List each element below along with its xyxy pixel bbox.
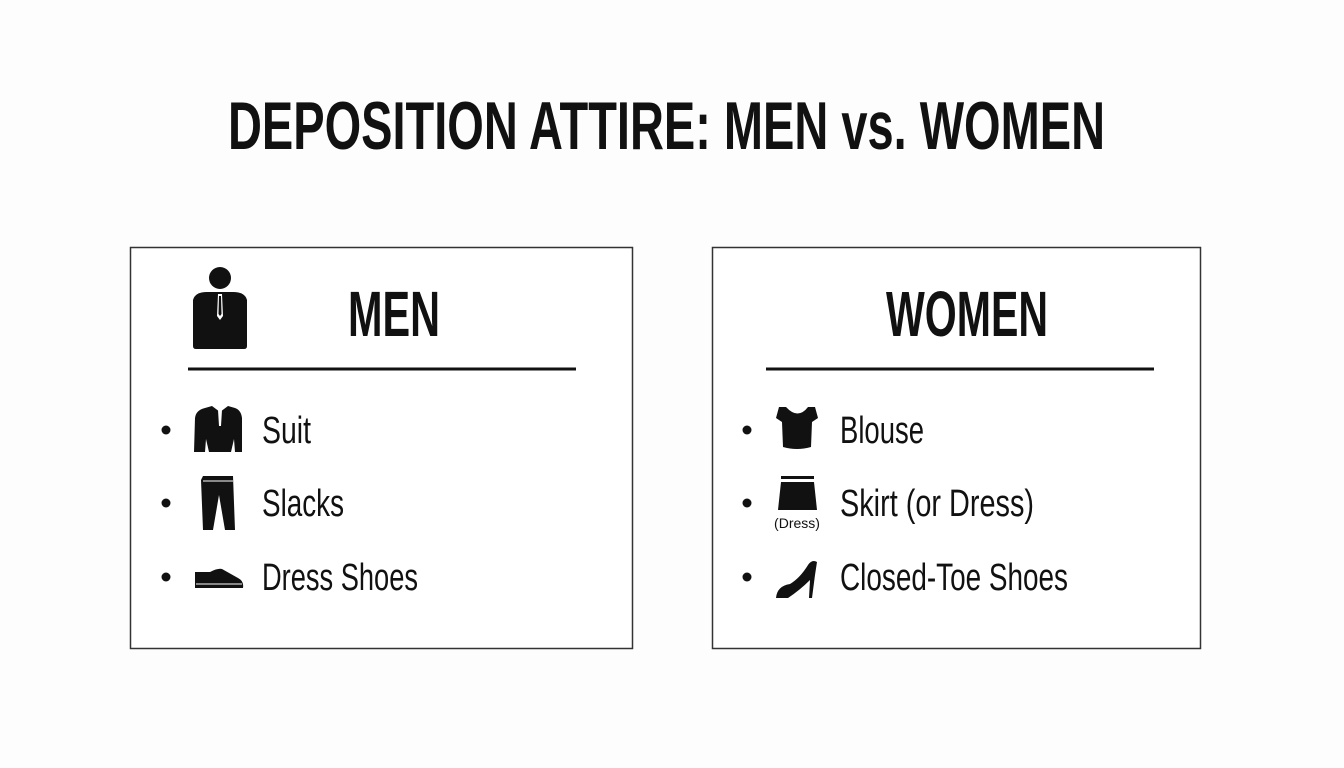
item: closed-toe shoes: Closed-Toe Shoes (840, 557, 1068, 599)
item: dress shoes (162, 557, 418, 599)
panel: men (130, 248, 632, 648)
heading: men: MEN (348, 278, 440, 350)
item: dress shoes: Dress Shoes (262, 557, 418, 599)
icon: man in suit (193, 267, 247, 349)
heading: women: WOMEN (886, 278, 1048, 350)
item: suit: Suit (262, 410, 311, 452)
item: blouse (742, 407, 924, 452)
item: suit (162, 406, 311, 452)
item: skirt: Skirt (or Dress) (840, 483, 1034, 525)
item: closed-toe shoes (742, 557, 1068, 599)
panel: women (712, 248, 1200, 648)
item: slacks: Slacks (262, 483, 344, 525)
item: blouse: Blouse (840, 410, 924, 452)
item: slacks (162, 476, 344, 530)
item: skirt: (Dress) (774, 515, 820, 531)
item: skirt (742, 476, 1034, 531)
